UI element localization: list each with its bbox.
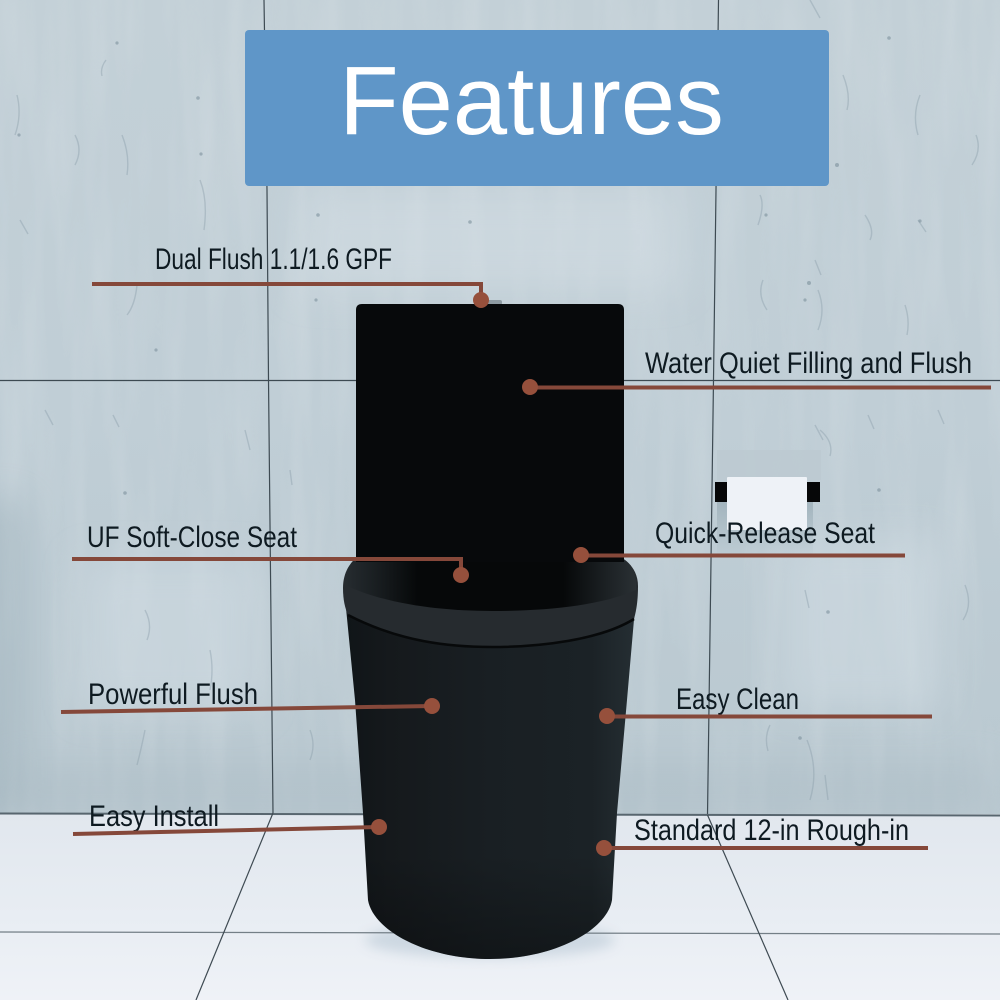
callout: Dual Flush xyxy=(92,243,489,308)
tank xyxy=(356,304,624,562)
callout: Easy Install: Easy Install xyxy=(89,800,219,833)
bowl xyxy=(346,608,635,959)
callout: Dual Flush: Dual Flush 1.1/1.6 GPF xyxy=(155,243,392,276)
icon: toilet paper holder xyxy=(715,450,821,556)
seat rim xyxy=(343,558,638,647)
callout: Easy Clean xyxy=(599,683,932,724)
callout: Water Quiet Filling and Flush xyxy=(522,347,991,395)
callout: Quick-Release Seat: Quick-Release Seat xyxy=(655,517,876,550)
callout: UF Soft-Close Seat: UF Soft-Close Seat xyxy=(87,521,298,554)
title banner xyxy=(245,30,829,186)
flush button xyxy=(486,300,502,305)
callout: Easy Clean: Easy Clean xyxy=(676,683,799,716)
seat lid top xyxy=(345,558,636,611)
callout: Quick-Release Seat xyxy=(573,517,905,563)
callout: Powerful Flush: Powerful Flush xyxy=(88,678,258,711)
callout: Standard 12-in Rough-in: Standard 12-in Rough-in xyxy=(634,814,909,847)
floor xyxy=(0,813,1000,1000)
callout: Standard 12-in Rough-in xyxy=(596,814,928,856)
callout: Powerful Flush xyxy=(61,678,440,714)
title banner: Features xyxy=(339,46,724,155)
toilet xyxy=(343,300,638,959)
callout: UF Soft-Close Seat xyxy=(72,521,469,583)
callout: Easy Install xyxy=(73,800,387,835)
